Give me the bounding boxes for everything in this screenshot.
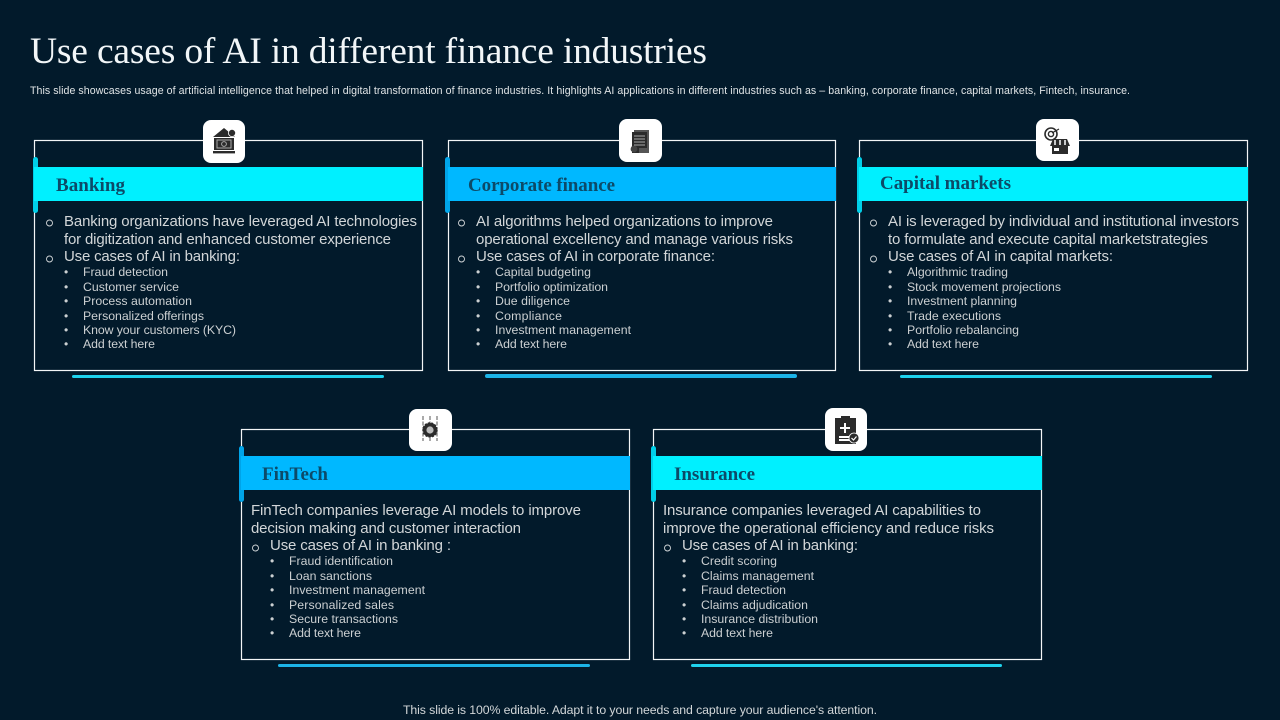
panel: banking [33, 120, 423, 378]
text block: capital markets: • [888, 294, 892, 308]
text block: insurance: improve the operational efficiency and reduce risks [663, 520, 994, 537]
heading: insurance: Insurance [674, 464, 755, 485]
text block: corporate finance: Compliance [495, 309, 562, 323]
text block: fintech: • [270, 554, 274, 568]
heading: fintech: FinTech [262, 464, 328, 485]
text block: fintech [251, 502, 581, 640]
text block: corporate finance: • [476, 309, 480, 323]
subtitle description: This slide showcases usage of artificial intelligence that helped in digital transformation of finance industries. It highlights AI applications in different industries such as – banking, corporate finance, capital markets, Fintech, insurance. [30, 85, 1130, 97]
text block: capital markets: • [888, 337, 892, 351]
icon: circuit with dollar gear [409, 409, 452, 451]
text block: fintech: • [270, 626, 274, 640]
heading band: insurance [653, 456, 1042, 490]
text block: insurance: • [682, 583, 686, 597]
text block: fintech: • [270, 612, 274, 626]
text block: insurance: • [682, 626, 686, 640]
text block: fintech: Secure transactions [289, 612, 398, 626]
text block: capital markets: AI is leveraged by individual and institutional investors [888, 213, 1239, 230]
heading: banking: Banking [56, 175, 126, 196]
accent bar: banking [72, 375, 384, 378]
heading band: fintech [241, 456, 630, 490]
text block: capital markets: • [888, 323, 892, 337]
text block: banking: • [64, 323, 68, 337]
accent bar: capital markets [900, 375, 1212, 378]
text block: banking [46, 213, 417, 351]
footer note: This slide is 100% editable. Adapt it to your needs and capture your audience's attention. [403, 703, 877, 717]
text block: corporate finance: Due diligence [495, 294, 570, 308]
text block: fintech: Fraud identification [289, 554, 393, 568]
accent bar: insurance [691, 664, 1002, 667]
text block: insurance: • [682, 612, 686, 626]
text block: corporate finance: Portfolio optimization [495, 280, 608, 294]
text block: insurance: Use cases of AI in banking: [682, 537, 858, 554]
accent bar: corporate finance [485, 374, 797, 378]
panel: corporate finance [445, 119, 836, 378]
heading: corporate finance: Corporate finance [468, 175, 615, 196]
icon: target and storefront [1036, 119, 1079, 161]
text block: insurance: Insurance distribution [701, 612, 818, 626]
text block: insurance: Claims adjudication [701, 598, 808, 612]
text block: corporate finance: • [476, 294, 480, 308]
band tab: insurance [651, 446, 656, 502]
text block: fintech: Investment management [289, 583, 426, 597]
text block: banking: • [64, 309, 68, 323]
text block: banking: Add text here [83, 337, 155, 351]
heading band: capital markets [859, 167, 1248, 201]
panel: insurance [651, 408, 1042, 667]
text block: banking: • [64, 265, 68, 279]
text block: fintech: Loan sanctions [289, 569, 372, 583]
icon: medical clipboard [825, 408, 867, 451]
text block: capital markets: Trade executions [907, 309, 1001, 323]
heading band: corporate finance [448, 167, 836, 201]
text block: capital markets: • [888, 309, 892, 323]
text block: insurance: • [682, 598, 686, 612]
text block: capital markets: Investment planning [907, 294, 1017, 308]
text block: capital markets: Stock movement projections [907, 280, 1061, 294]
heading: capital markets: Capital markets [880, 173, 1011, 194]
text block: banking: Use cases of AI in banking: [64, 248, 240, 265]
band tab: corporate finance [445, 157, 450, 213]
text block: corporate finance: • [476, 280, 480, 294]
text block: fintech: Personalized sales [289, 598, 394, 612]
text block: insurance: Fraud detection [701, 583, 786, 597]
text block: insurance: Credit scoring [701, 554, 777, 568]
text block: fintech: Use cases of AI in banking : [270, 537, 451, 554]
text block: corporate finance: AI algorithms helped organizations to improve [476, 213, 773, 230]
text block: banking: Fraud detection [83, 265, 168, 279]
text block: fintech: • [270, 598, 274, 612]
panel: capital markets [857, 119, 1248, 378]
text block: corporate finance: • [476, 323, 480, 337]
icon: bank with money [203, 120, 245, 163]
text block: capital markets: Use cases of AI in capital markets: [888, 248, 1113, 265]
text block: corporate finance: operational excellency and manage various risks [476, 231, 793, 248]
text block: corporate finance: Capital budgeting [495, 265, 591, 279]
text block: capital markets: Portfolio rebalancing [907, 323, 1019, 337]
text block: banking: Process automation [83, 294, 192, 308]
text block: banking: for digitization and enhanced customer experience [64, 231, 391, 248]
band tab: capital markets [857, 157, 862, 213]
text block: fintech: • [270, 583, 274, 597]
text block: banking: • [64, 294, 68, 308]
text block: banking: Banking organizations have leveraged AI technologies [64, 213, 417, 230]
panel: fintech [239, 409, 630, 667]
text block: fintech: Add text here [289, 626, 361, 640]
text block: capital markets: • [888, 265, 892, 279]
band tab: banking [33, 157, 38, 213]
text block: corporate finance: Add text here [495, 337, 567, 351]
text block: capital markets [870, 213, 1239, 351]
text block: banking: • [64, 280, 68, 294]
text block: capital markets: Algorithmic trading [907, 265, 1008, 279]
text block: corporate finance: • [476, 265, 480, 279]
band tab: fintech [239, 446, 244, 502]
text block: insurance: Claims management [701, 569, 815, 583]
text block: capital markets: • [888, 280, 892, 294]
text block: insurance: Add text here [701, 626, 773, 640]
text block: corporate finance [458, 213, 793, 351]
text block: insurance: • [682, 554, 686, 568]
text block: banking: • [64, 337, 68, 351]
text block: fintech: decision making and customer interaction [251, 520, 521, 537]
title: Use cases of AI in different finance industries [30, 31, 707, 72]
heading band: banking [34, 167, 423, 201]
icon: financial document [619, 119, 662, 162]
text block: banking: Know your customers (KYC) [83, 323, 236, 337]
text block: corporate finance: Use cases of AI in corporate finance: [476, 248, 715, 265]
text block: fintech: FinTech companies leverage AI models to improve [251, 502, 581, 519]
text block: banking: Personalized offerings [83, 309, 204, 323]
text block: insurance: • [682, 569, 686, 583]
text block: fintech: • [270, 569, 274, 583]
text block: capital markets: Add text here [907, 337, 979, 351]
accent bar: fintech [278, 664, 590, 667]
text block: insurance [663, 502, 994, 640]
text block: corporate finance: • [476, 337, 480, 351]
text block: insurance: Insurance companies leveraged AI capabilities to [663, 502, 981, 519]
text block: capital markets: to formulate and execute capital marketstrategies [888, 231, 1208, 248]
text block: banking: Customer service [83, 280, 179, 294]
text block: corporate finance: Investment management [495, 323, 632, 337]
